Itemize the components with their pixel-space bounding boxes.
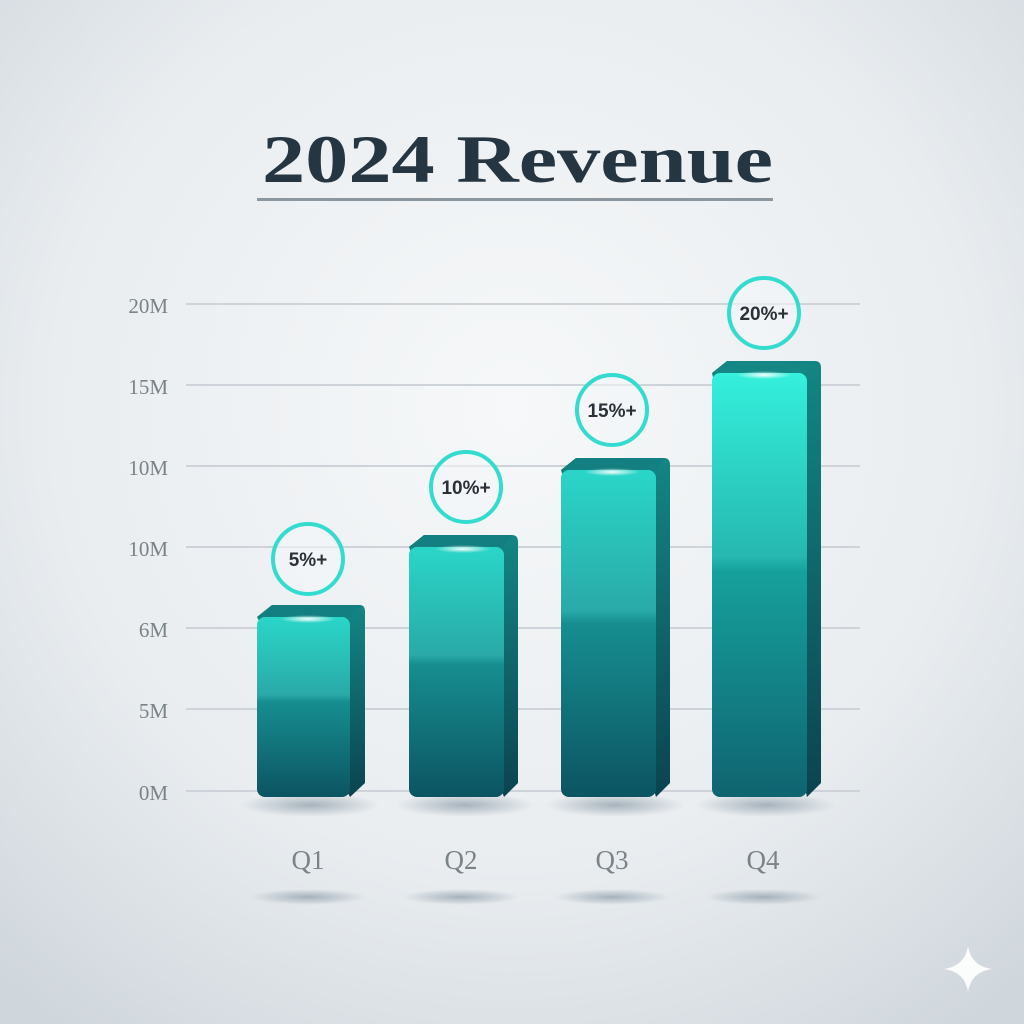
x axis labels xyxy=(292,845,780,875)
y axis labels: 10M xyxy=(128,537,168,561)
badge 20%: 20%+ xyxy=(739,304,789,325)
badge 10% xyxy=(431,452,501,522)
bar Q4 xyxy=(696,361,836,817)
bar chart xyxy=(240,361,836,817)
icon: sparkle xyxy=(944,946,992,992)
y axis labels: 6M xyxy=(139,618,168,642)
bar Q3 xyxy=(545,458,685,817)
bar Q1 xyxy=(240,605,380,817)
x axis labels: Q1 xyxy=(292,845,324,875)
y axis labels: 5M xyxy=(139,699,168,723)
badge 20% xyxy=(729,278,799,348)
floor shadows xyxy=(250,889,821,905)
badge 5%: 5%+ xyxy=(289,550,327,571)
bar Q2 xyxy=(395,535,535,817)
x axis labels: Q3 xyxy=(596,845,628,875)
growth badges xyxy=(273,278,799,594)
y axis labels: 0M xyxy=(139,781,168,805)
badge 5% xyxy=(273,524,343,594)
badge 10%: 10%+ xyxy=(441,478,491,499)
y axis labels: 20M xyxy=(128,294,168,318)
y axis labels: 15M xyxy=(128,375,168,399)
x axis labels: Q2 xyxy=(444,845,478,875)
x axis labels: Q4 xyxy=(746,845,780,875)
badge 15% xyxy=(577,375,647,445)
badge 15%: 15%+ xyxy=(587,401,637,422)
title: 2024 Revenue xyxy=(262,121,773,197)
y axis labels: 10M xyxy=(128,456,168,480)
y axis labels xyxy=(128,294,168,805)
